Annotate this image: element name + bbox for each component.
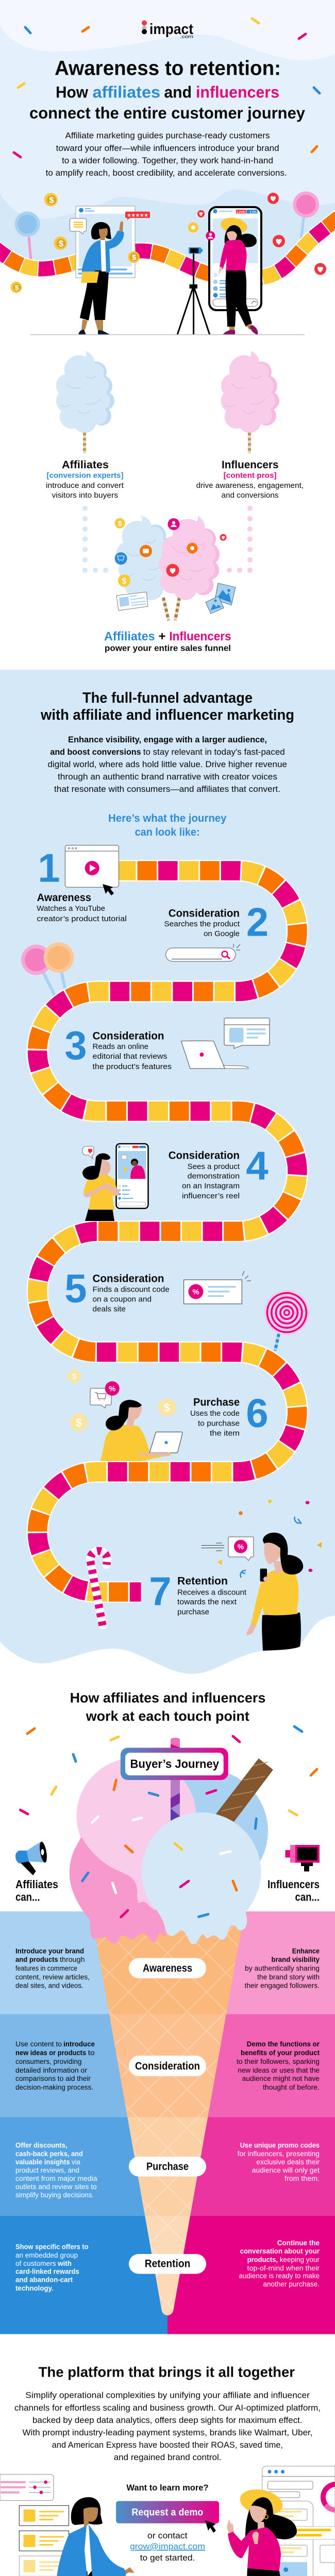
coins: $	[59, 239, 64, 248]
step 1: creator’s product tutorial	[37, 914, 127, 923]
step 3: editorial that reviews	[93, 1052, 167, 1061]
step 7: Retention	[177, 1574, 228, 1587]
column headings: can...	[295, 1890, 320, 1903]
purchase: influencers text: exclusive deals their	[257, 2158, 320, 2166]
platform text	[14, 2391, 321, 2462]
retention: affiliates text	[15, 2243, 89, 2292]
consideration: influencers text: benefits of your product	[241, 2049, 320, 2057]
consideration: influencers text: Demo the functions or	[247, 2040, 320, 2048]
live phone: 10k	[249, 211, 257, 214]
coins	[10, 193, 67, 293]
title: connect the entire customer journey	[29, 104, 305, 122]
title: Awareness to retention:	[55, 57, 281, 79]
social icons: $	[132, 253, 137, 262]
photo icons	[206, 583, 236, 614]
purchase: influencers text: audience will only get	[252, 2166, 320, 2174]
call to action: to get started.	[140, 2553, 195, 2563]
full-funnel text: and boost conversions	[50, 748, 141, 757]
band backgrounds	[0, 1911, 335, 2334]
step 7: purchase	[177, 1607, 209, 1617]
awareness: affiliates text: through	[60, 1956, 85, 1963]
right dashboard panels	[262, 2466, 335, 2576]
floating icons around cotton candy	[115, 518, 227, 587]
consideration: influencers text: thought of before.	[263, 2083, 320, 2091]
figure: woman with phone, retention	[246, 1533, 303, 1651]
discount bubble	[201, 1537, 254, 1561]
article card	[116, 592, 148, 611]
journey subheading	[108, 812, 227, 838]
figure: affiliate woman	[78, 221, 124, 335]
retention: influencers text: keeping your	[280, 2256, 320, 2264]
logo: .com	[180, 34, 193, 39]
step 7: 7	[149, 1569, 172, 1614]
influencers label: and conversions	[222, 491, 278, 500]
affiliates label: visitors into buyers	[52, 491, 118, 500]
step 7: Receives a discount	[177, 1588, 247, 1597]
retention: influencers text: products,	[247, 2256, 278, 2264]
pill: consideration	[129, 2056, 206, 2076]
step 5: 5	[64, 1266, 87, 1311]
pill: retention	[129, 2254, 206, 2274]
intro text: toward your offer—while influencers introduce your brand	[56, 143, 279, 153]
purchase: affiliates text: simplify buying decisions.	[15, 2191, 94, 2199]
step 1: Watches a YouTube	[37, 904, 105, 913]
consideration: influencers text: to their followers, sparking	[237, 2058, 320, 2065]
call to action: Want to learn more?	[126, 2483, 209, 2493]
touch point heading: work at each touch point	[86, 1708, 249, 1724]
call to action	[116, 2483, 219, 2563]
consideration: affiliates text: new ideas or products	[15, 2049, 86, 2057]
floating icons around cotton candy: $	[122, 577, 127, 586]
step 7: towards the next	[177, 1598, 237, 1606]
column headings: Influencers	[267, 1878, 320, 1891]
purchase: influencers text: for influencers, presenting	[238, 2150, 320, 2158]
combined label: +	[159, 630, 166, 643]
lollipops on journey	[21, 942, 74, 995]
dotted connector: influencers	[227, 506, 253, 573]
rating badge	[125, 212, 150, 220]
purchase: affiliates text: content from major media	[15, 2175, 97, 2182]
coins faded: $	[164, 1401, 170, 1414]
pill: awareness	[129, 1958, 206, 1978]
title: How	[56, 83, 88, 101]
platform text: With prompt industry-leading payment systems, brands like Walmart, Uber,	[23, 2428, 312, 2437]
candy cane	[90, 1551, 107, 1625]
platform text: channels for effortless scaling and business growth. Our AI-optimized platform,	[14, 2403, 321, 2413]
retention: affiliates text: technology.	[15, 2284, 54, 2292]
touch point sprinkles	[20, 1726, 317, 1815]
scoop sprinkles	[82, 1780, 257, 1917]
purchase: affiliates text: Offer discounts,	[15, 2142, 68, 2149]
retention: affiliates text: Show specific offers to	[15, 2243, 89, 2251]
step 1: 1	[38, 845, 60, 891]
title: influencers	[196, 83, 279, 101]
purchase: affiliates text	[15, 2142, 97, 2199]
step 6: Uses the code	[190, 1409, 240, 1418]
step 3: Consideration	[93, 1029, 164, 1042]
full-funnel text: to stay relevant in today's fast-paced	[143, 748, 285, 757]
full-funnel text: digital world, where ads hold little value. Drive higher revenue	[47, 760, 287, 769]
purchase: affiliates text: product reviews, and	[15, 2166, 79, 2174]
pill: awareness: Awareness	[143, 1962, 192, 1974]
speech bubble	[70, 218, 87, 234]
tripod camera	[177, 247, 210, 335]
step 4: on an Instagram	[182, 1182, 240, 1191]
swirl lollipop	[264, 1290, 309, 1335]
platform heading: The platform that brings it all together	[39, 2364, 295, 2380]
cart bubble: %	[109, 1385, 115, 1393]
left dashboard panels	[0, 2475, 69, 2576]
retention: influencers text	[239, 2239, 320, 2288]
cart bubble	[90, 1381, 120, 1408]
retention: affiliates text: an embedded group	[15, 2251, 78, 2259]
purchase: affiliates text: outlets and review sites to	[15, 2183, 97, 2191]
ice cream scoops	[70, 1738, 273, 1944]
awareness: affiliates text: features in commerce	[15, 1964, 77, 1972]
awareness: influencers text: the brand story with	[257, 1973, 320, 1981]
influencers label: [content pros]	[224, 471, 277, 480]
title: affiliates	[93, 83, 160, 101]
step 2: Searches the product	[164, 920, 240, 928]
combined label: Affiliates	[104, 630, 155, 643]
consideration: influencers text: audience might not have	[242, 2075, 320, 2082]
candy road	[0, 216, 335, 332]
icon: camera	[286, 1845, 320, 1871]
touch point heading: How affiliates and influencers	[70, 1690, 265, 1705]
retention: influencers text: conversation about your	[240, 2247, 320, 2255]
step 5: on a coupon and	[93, 1295, 152, 1303]
influencers label	[196, 459, 304, 500]
icon: megaphone	[15, 1841, 48, 1875]
column headings	[15, 1878, 320, 1903]
step 3	[64, 1018, 270, 1071]
combined label: power your entire sales funnel	[105, 643, 231, 653]
coins faded: $	[72, 1372, 77, 1381]
discount bubble: %	[238, 1543, 244, 1551]
retention: affiliates text: of customers	[15, 2260, 56, 2267]
purchase: influencers text	[238, 2142, 320, 2182]
retention: influencers text: top-of-mind when their	[247, 2264, 320, 2272]
candy road: journey	[37, 871, 297, 1592]
retention: influencers text: audience is ready to make	[239, 2272, 320, 2280]
coins: $	[15, 283, 19, 292]
consideration: affiliates text: to	[88, 2049, 95, 2057]
step 6: 6	[246, 1391, 269, 1436]
affiliates label: Affiliates	[62, 459, 109, 471]
consideration: influencers text: new ideas or uses that the	[238, 2066, 320, 2074]
influencers label: drive awareness, engagement,	[196, 481, 304, 490]
pill: purchase	[129, 2157, 206, 2176]
step 6: the item	[210, 1429, 240, 1438]
step 6	[190, 1391, 269, 1438]
step 6: Purchase	[193, 1396, 240, 1409]
figure: influencer woman	[219, 216, 258, 335]
platform text: backed by deep data analytics, offers deep sights for maximum effect.	[32, 2415, 303, 2425]
step 7	[149, 1569, 247, 1617]
consideration: affiliates text: decision-making process.	[15, 2083, 93, 2091]
platform text: Simplify operational complexities by unifying your affiliate and influencer	[25, 2391, 310, 2400]
live phone	[209, 207, 261, 310]
step 4: Sees a product	[188, 1162, 240, 1171]
affiliates label: [conversion experts]	[46, 471, 124, 480]
step 4: 4	[246, 1143, 269, 1189]
full-funnel heading: with affiliate and influencer marketing	[40, 707, 294, 723]
step 1	[37, 845, 127, 923]
journey subheading: Here’s what the journey	[108, 812, 227, 824]
retention: affiliates text: and abandon-cart	[15, 2276, 73, 2284]
social post board	[76, 206, 135, 278]
social icons	[128, 193, 326, 275]
platform text: and regained brand control.	[114, 2452, 222, 2462]
pill: purchase: Purchase	[146, 2161, 189, 2173]
cotton candy: influencers	[221, 351, 279, 453]
step 5	[64, 1266, 251, 1314]
live phone: LIVE	[237, 210, 245, 214]
consideration: affiliates text	[15, 2040, 95, 2091]
step 4: influencer’s reel	[182, 1192, 240, 1200]
step 3: 3	[64, 1023, 87, 1068]
swirl lollipop stick	[275, 1334, 279, 1351]
purchase: affiliates text: via	[72, 2158, 80, 2166]
hero sprinkles	[14, 19, 320, 157]
step 4: demonstration	[188, 1172, 240, 1181]
floating icons around cotton candy: $	[118, 519, 122, 528]
purchase: influencers text: Use unique promo codes	[240, 2142, 320, 2149]
purchase: affiliates text: valuable insights	[15, 2158, 70, 2166]
column headings: can...	[15, 1890, 40, 1903]
step 2: on Google	[204, 929, 240, 938]
step 5: %	[192, 1288, 199, 1296]
awareness: affiliates text: deal sites, and videos.	[15, 1982, 83, 1990]
full-funnel text: that resonate with consumers—and affiliates that convert.	[54, 785, 280, 794]
full-funnel heading: The full-funnel advantage	[82, 690, 253, 706]
combined label: Influencers	[169, 630, 231, 643]
awareness: influencers text	[245, 1947, 320, 1990]
journey panel background	[0, 670, 335, 1705]
confetti	[217, 1499, 322, 1578]
step 3: Reads an online	[93, 1042, 148, 1051]
figure: woman with phone	[82, 1144, 148, 1221]
journey subheading: can look like:	[135, 826, 200, 838]
buyer's journey sign	[121, 1748, 228, 1780]
title	[29, 57, 305, 122]
intro text: to amplify reach, boost credibility, and accelerate conversions.	[46, 168, 287, 178]
awareness: influencers text: brand visibility	[271, 1956, 320, 1963]
retention: affiliates text: with	[57, 2260, 72, 2267]
step 2: 2	[246, 900, 269, 945]
consideration: affiliates text: detailed information or	[15, 2066, 88, 2074]
hero background waves	[0, 0, 335, 330]
affiliates label	[46, 459, 124, 500]
retention: influencers text: another purchase.	[263, 2280, 320, 2288]
logo: impact	[149, 21, 193, 38]
consideration: affiliates text: introduce	[63, 2040, 95, 2048]
call to action: or contact	[147, 2531, 188, 2540]
dotted connector: affiliates	[82, 506, 108, 573]
step 5: Finds a discount code	[93, 1285, 170, 1294]
combined cotton candy	[111, 511, 227, 620]
ground line	[30, 334, 305, 335]
step 6: to purchase	[198, 1419, 240, 1428]
figure: footer influencer woman	[227, 2486, 299, 2576]
step 1: Awareness	[37, 891, 91, 904]
consideration: affiliates text: Use content to	[15, 2040, 62, 2048]
intro text: to a wider following. Together, they work hand-in-hand	[62, 156, 273, 165]
awareness: influencers text: Enhance	[292, 1947, 320, 1955]
consideration: affiliates text: comparisons to aid their	[15, 2075, 91, 2082]
step 2	[164, 900, 269, 961]
lollipop: blue	[14, 211, 40, 260]
pill: consideration: Consideration	[135, 2060, 200, 2072]
awareness: influencers text: their engaged followers.	[245, 1982, 320, 1990]
logo	[142, 21, 193, 39]
step 5: Consideration	[93, 1272, 164, 1284]
intro text	[46, 131, 287, 178]
retention: influencers text: Continue the	[277, 2239, 320, 2247]
retention: affiliates text: card-linked rewards	[15, 2268, 79, 2275]
rating badge: ★★★★★	[127, 213, 148, 218]
awareness: affiliates text: and products	[15, 1956, 58, 1963]
pill: retention: Retention	[145, 2258, 190, 2270]
awareness: affiliates text: Introduce your brand	[15, 1947, 84, 1955]
figure: footer affiliate woman	[52, 2497, 135, 2576]
consideration: affiliates text: consumers, providing	[15, 2058, 81, 2065]
purchase: affiliates text: cash-back perks, and	[15, 2150, 83, 2158]
call to action: grow@impact.com	[130, 2541, 205, 2551]
touch point heading	[70, 1690, 265, 1724]
awareness: affiliates text	[15, 1947, 90, 1990]
awareness: affiliates text: content, review articles,	[15, 1973, 90, 1981]
full-funnel text	[47, 735, 287, 794]
coins faded	[68, 1369, 176, 1431]
step 4	[169, 1143, 269, 1200]
coins: $	[49, 195, 54, 205]
buyer's journey sign: Buyer’s Journey	[130, 1757, 219, 1771]
awareness: influencers text: by authentically sharing	[245, 1964, 320, 1972]
consideration: influencers text	[237, 2040, 320, 2091]
intro text: Affiliate marketing guides purchase-ready customers	[65, 131, 270, 141]
figure: woman with laptop	[100, 1400, 182, 1461]
full-funnel heading	[40, 690, 294, 723]
full-funnel text: through an authentic brand narrative with creator voices	[58, 772, 277, 782]
combined label	[104, 630, 231, 653]
step 4: Consideration	[169, 1149, 240, 1162]
platform text: and American Express have boosted their ROAS, saved time,	[52, 2440, 283, 2450]
title: and	[164, 83, 192, 101]
cotton candy: affiliates	[56, 351, 114, 453]
step 3: the product’s features	[93, 1062, 172, 1071]
coins faded: $	[75, 1416, 82, 1429]
ice cream cone	[96, 1925, 241, 2315]
step 2: Consideration	[169, 907, 240, 919]
influencers label: Influencers	[222, 459, 279, 471]
step 5: deals site	[93, 1304, 126, 1314]
full-funnel text: Enhance visibility, engage with a larger audience,	[68, 735, 267, 744]
lollipop: pink	[293, 192, 319, 240]
column headings: Affiliates	[15, 1878, 58, 1891]
purchase: influencers text: from them.	[284, 2175, 320, 2182]
affiliates label: introduce and convert	[46, 481, 124, 490]
call to action: Request a demo	[131, 2506, 203, 2518]
